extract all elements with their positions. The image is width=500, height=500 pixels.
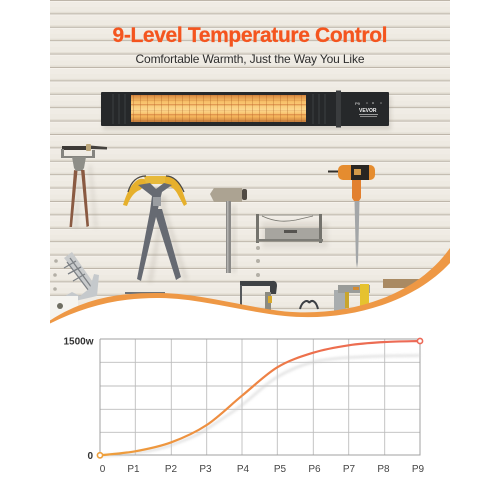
x axis labels: P7 [343, 464, 356, 475]
wall screws [256, 246, 260, 277]
x axis labels: 0 [100, 464, 106, 475]
y axis labels [63, 336, 94, 462]
title: 9-Level Temperature Control [112, 24, 388, 47]
tool: small pliers [300, 301, 318, 309]
tool: steel hammer [210, 188, 247, 273]
y axis labels: 0 [87, 451, 93, 462]
heater shadow [103, 96, 391, 130]
control panel: VEVOR [359, 108, 377, 114]
patio heater [101, 90, 389, 128]
x axis labels: P1 [127, 464, 140, 475]
heating element glow [131, 95, 306, 122]
orange wave band [50, 248, 450, 324]
chart: power curve [63, 336, 425, 475]
subtitle: Comfortable Warmth, Just the Way You Like [136, 52, 365, 66]
x axis labels: P2 [165, 464, 178, 475]
x axis labels: P6 [308, 464, 321, 475]
tool: wire rack [256, 214, 328, 248]
curve shadow [100, 356, 420, 456]
tool: caliper with brown legs [61, 144, 107, 228]
y axis labels: 1500w [63, 336, 94, 348]
end point [417, 338, 423, 344]
x axis labels: P4 [237, 464, 250, 475]
x axis labels: P3 [199, 464, 212, 475]
start point [97, 453, 103, 458]
power curve line [100, 341, 420, 455]
tool: yellow handled pliers [123, 176, 187, 282]
wood block [383, 279, 419, 288]
heater vents [113, 94, 325, 124]
x axis labels [100, 464, 425, 475]
tool: white clamp, bottom left [50, 252, 99, 320]
tool: black clamp, bottom centre [125, 280, 277, 310]
tool: orange drill spike [328, 165, 375, 268]
photo: slatwall background with tools [50, 0, 450, 325]
x axis labels: P5 [274, 464, 287, 475]
x axis labels: P8 [377, 464, 390, 475]
control panel: P9 [355, 101, 361, 106]
control panel [355, 101, 382, 117]
chart grid [100, 339, 420, 455]
tool: yellow drill [334, 284, 370, 310]
x axis labels: P9 [412, 464, 425, 475]
